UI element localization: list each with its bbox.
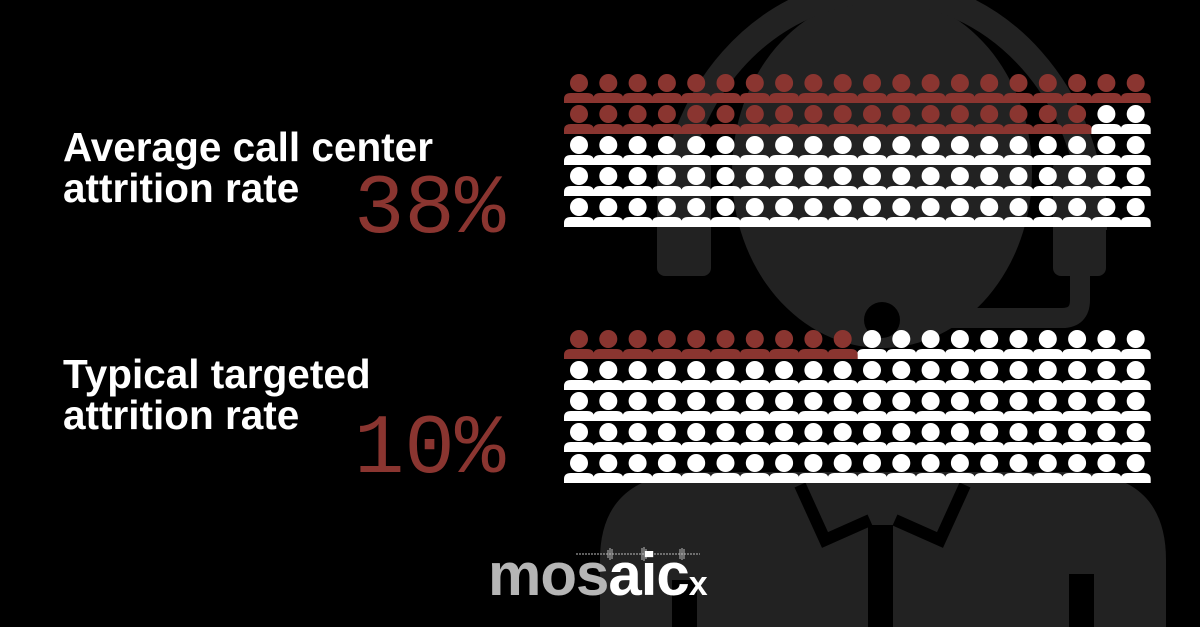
stat: 38%: 38% (354, 163, 505, 258)
heading: typical targeted attrition rate: Typical targeted (63, 351, 371, 397)
heading: average call center attrition rate: attrition rate (63, 165, 299, 211)
heading: average call center attrition rate: Average call center (63, 124, 433, 170)
heading: typical targeted attrition rate (63, 351, 371, 438)
heading: average call center attrition rate (63, 124, 433, 211)
stat: 10%: 10% (354, 403, 505, 498)
logo: mosaicx: mosaicx (488, 541, 707, 608)
heading: typical targeted attrition rate: attrition rate (63, 392, 299, 438)
